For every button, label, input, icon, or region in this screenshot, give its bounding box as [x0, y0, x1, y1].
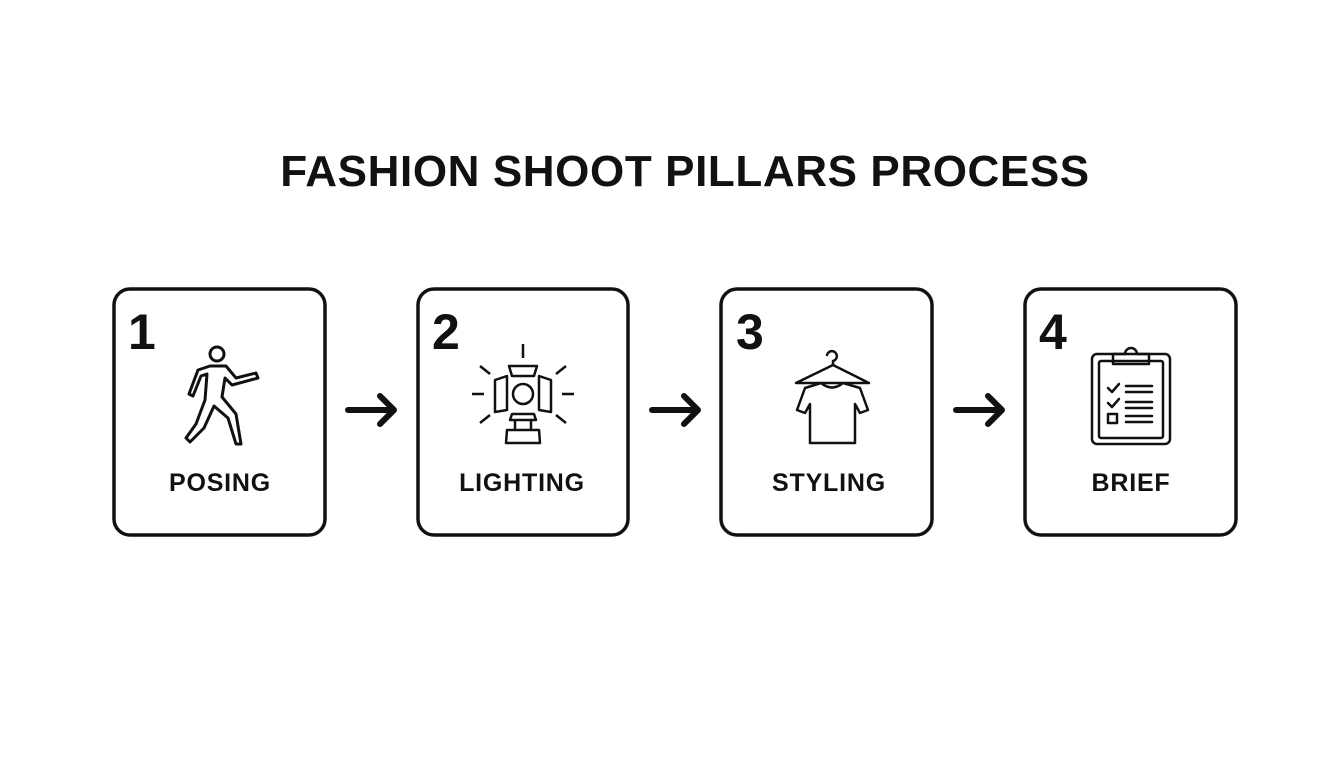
panel: brief: BRIEF [1092, 469, 1170, 497]
icon: studio light [472, 344, 574, 443]
panel: posing: POSING [169, 469, 271, 497]
panel: lighting: LIGHTING [459, 469, 585, 497]
panel: lighting [418, 289, 628, 535]
title: FASHION SHOOT PILLARS PROCESS [280, 147, 1090, 196]
panel: lighting: 2 [432, 304, 460, 360]
panel: styling: STYLING [772, 469, 886, 497]
arrow 2 [652, 396, 698, 424]
arrow 3 [956, 396, 1002, 424]
panel: posing: 1 [128, 304, 156, 360]
arrow 1 [348, 396, 394, 424]
icon: shirt on hanger [796, 351, 869, 443]
panel: brief: 4 [1039, 304, 1067, 360]
panel: brief [1025, 289, 1236, 535]
icon: running figure [186, 347, 258, 444]
icon: clipboard checklist [1092, 348, 1170, 444]
panel: posing [114, 289, 325, 535]
panel: styling [721, 289, 932, 535]
panel: styling: 3 [736, 304, 764, 360]
